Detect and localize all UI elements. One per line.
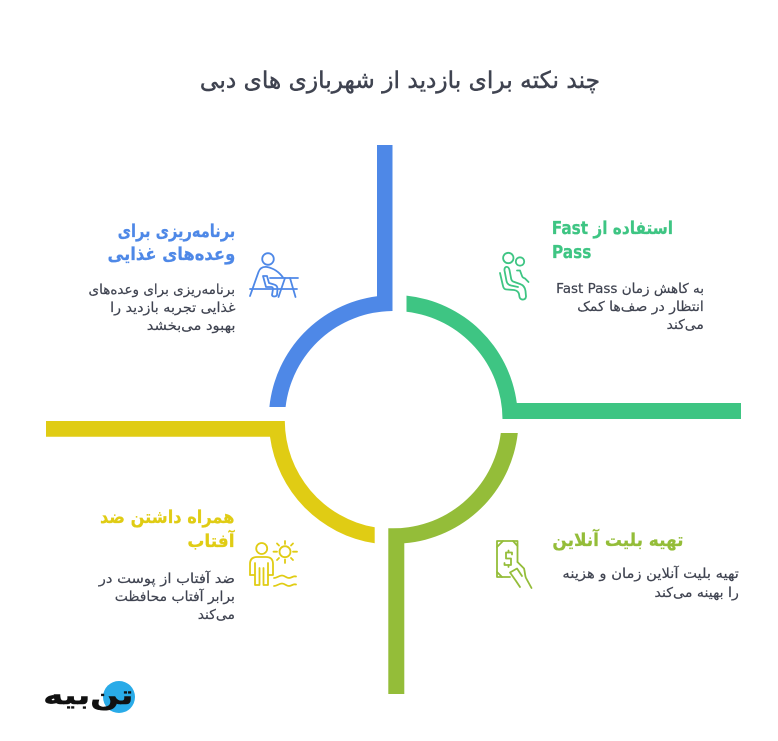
- logo: [43, 681, 135, 713]
- heading: fast pass: [552, 218, 673, 262]
- heading: sunscreen: همراه داشتن ضد: [100, 507, 235, 528]
- title: چند نکته برای بازدید از شهربازی های دبی: [200, 67, 600, 94]
- segment: green arc: [406, 296, 741, 419]
- heading: meal planning: [107, 220, 235, 265]
- text: sunscreen: ضد آفتاب از پوست در: [99, 571, 235, 587]
- segment: blue arc: [269, 145, 392, 407]
- heading: sunscreen: آفتاب: [188, 530, 235, 552]
- text: fast pass: [556, 281, 704, 333]
- segment: olive arc: [388, 433, 518, 694]
- text: fast pass: می‌کند: [667, 317, 704, 333]
- heading: online ticket: تهیه بلیت آنلاین: [552, 530, 683, 551]
- text: sunscreen: برابر آفتاب محافظت: [115, 589, 235, 605]
- heading: meal planning: وعده‌های غذایی: [107, 244, 235, 265]
- text: meal planning: بهبود می‌بخشد: [146, 318, 235, 334]
- heading: meal planning: برنامه‌ریزی برای: [117, 220, 235, 242]
- logo circle: [103, 681, 135, 713]
- text: meal planning: برنامه‌ریزی برای وعده‌های: [89, 282, 235, 298]
- heading: fast pass: Pass: [552, 242, 591, 262]
- text: meal planning: [89, 282, 236, 334]
- logo wordmark: تن‌بیه: [43, 681, 133, 711]
- heading: sunscreen: [100, 507, 235, 552]
- icon: banknote in hand: [497, 541, 532, 588]
- heading: fast pass: استفاده از Fast: [552, 218, 673, 239]
- text: sunscreen: می‌کند: [198, 607, 235, 623]
- text: online ticket: را بهینه می‌کند: [655, 585, 739, 601]
- text: online ticket: تهیه بلیت آنلاین زمان و هزینه: [563, 566, 739, 582]
- segment: yellow arc: [46, 421, 375, 543]
- text: fast pass: انتظار در صف‌ها کمک: [577, 299, 704, 315]
- icon: person with sun and waves: [250, 541, 297, 586]
- text: meal planning: غذایی تجربه بازدید را: [110, 300, 235, 316]
- text: sunscreen: [98, 570, 235, 623]
- icon: person at picnic table: [250, 253, 298, 297]
- text: fast pass: به کاهش زمان Fast Pass: [556, 281, 704, 297]
- icon: seated people: [500, 253, 528, 300]
- text: online ticket: [563, 565, 739, 601]
